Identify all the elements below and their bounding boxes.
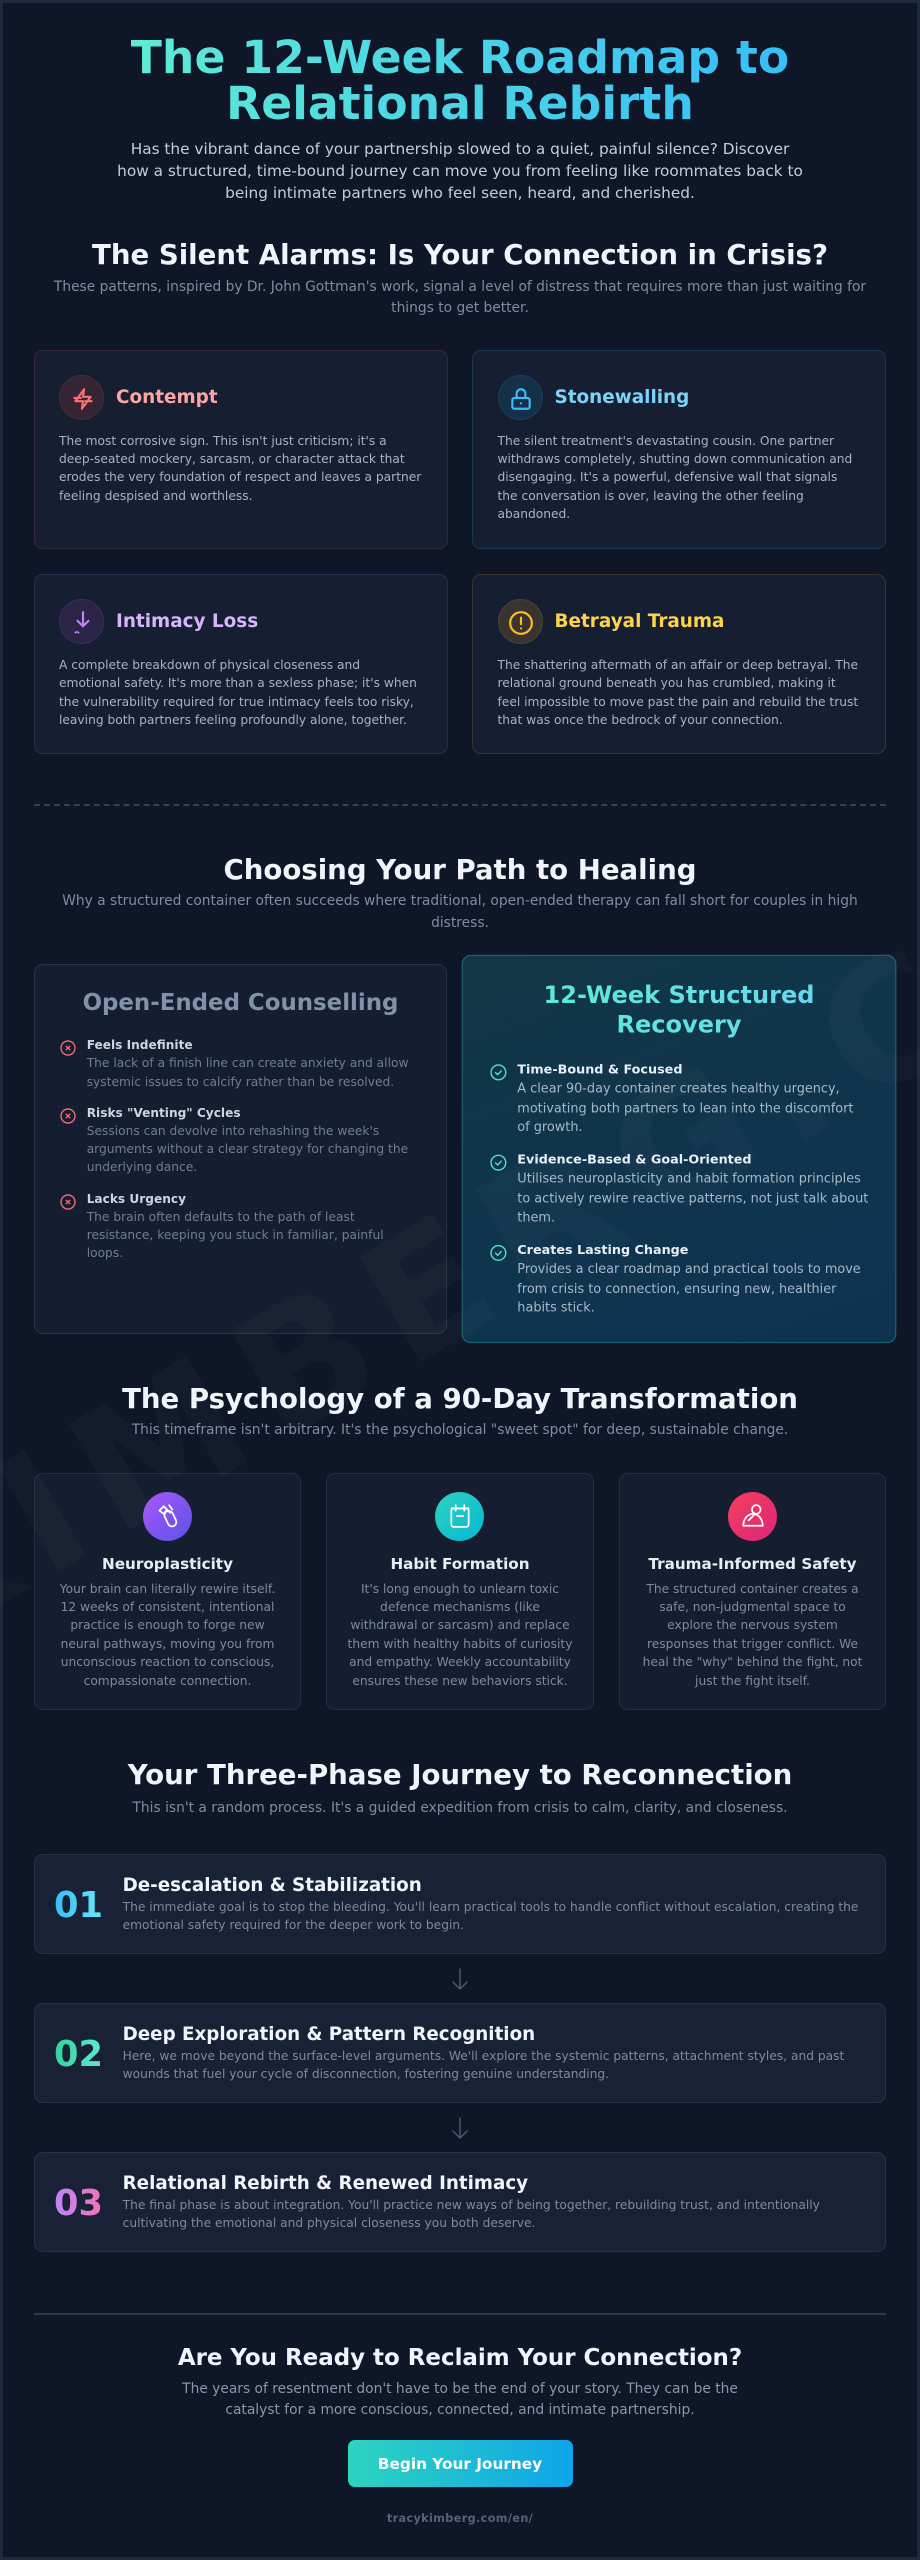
item: venting cycles xyxy=(60,1106,408,1174)
phase number 03: 03 xyxy=(54,2183,103,2224)
icon: x circle xyxy=(60,1108,76,1124)
habit formation text: and empathy. Weekly accountability xyxy=(349,1655,571,1669)
phase number 01: 01 xyxy=(54,1885,103,1926)
habit formation title: Habit Formation xyxy=(390,1555,530,1573)
panel: open-ended counselling xyxy=(34,964,447,1334)
icon: x circle xyxy=(60,1194,76,1210)
betrayal trauma text: feel impossible to move past the pain and rebuild the trust xyxy=(498,695,858,709)
item: lasting change: habits stick. xyxy=(517,1300,595,1315)
heading: three-phase journey: Your Three-Phase Journey to Reconnection xyxy=(128,1758,792,1791)
recovery heading: Recovery xyxy=(616,1011,742,1038)
item: time-bound xyxy=(490,1062,854,1134)
item: time-bound: of growth. xyxy=(517,1120,583,1134)
habit formation text: It's long enough to unlearn toxic xyxy=(361,1582,559,1596)
betrayal trauma title: Betrayal Trauma xyxy=(554,611,724,632)
trauma-informed text xyxy=(643,1582,862,1688)
item: venting cycles: Risks "Venting" Cycles xyxy=(87,1106,241,1120)
item: feels indefinite: The lack of a finish line can create anxiety and allow xyxy=(87,1056,408,1070)
panel: phase 1 xyxy=(34,1854,886,1954)
stonewalling text: disengaging. It's a powerful, defensive wall that signals xyxy=(498,470,837,484)
phase 2 text: wounds that fuel your cycle of disconnection, fostering genuine understanding. xyxy=(123,2067,609,2081)
contempt text: erodes the very foundation of respect and leaves a partner xyxy=(59,470,421,484)
intro text xyxy=(117,140,803,202)
item: evidence-based: Evidence-Based & Goal-Oriented xyxy=(517,1152,752,1167)
panel: contempt xyxy=(34,350,448,549)
icon: lightning bolt xyxy=(59,375,104,420)
intimacy loss text: leaving both partners feeling profoundly alone, together. xyxy=(59,713,407,727)
trauma-informed text: just the fight itself. xyxy=(695,1674,810,1688)
intro text: how a structured, time-bound journey can move you from feeling like roommates back to xyxy=(117,162,803,180)
stonewalling text xyxy=(497,434,852,521)
habit formation text: withdrawal or sarcasm) and replace xyxy=(350,1618,570,1632)
item: evidence-based: Utilises neuroplasticity and habit formation principles xyxy=(517,1171,861,1186)
phase 1 text: emotional safety required for the deeper work to begin. xyxy=(123,1918,464,1932)
heading: call to action: Are You Ready to Reclaim Your Connection? xyxy=(178,2345,742,2371)
subheading: three-phase journey: This isn't a random process. It's a guided expedition from crisis to calm, clarity, and closeness. xyxy=(132,1800,788,1816)
item: feels indefinite: Feels Indefinite xyxy=(87,1038,193,1052)
trauma-informed text: The structured container creates a xyxy=(646,1582,859,1596)
icon: brain xyxy=(143,1492,192,1540)
neuroplasticity title: Neuroplasticity xyxy=(102,1555,233,1573)
neuroplasticity text xyxy=(60,1582,275,1688)
intro text: Has the vibrant dance of your partnership slowed to a quiet, painful silence? Discover xyxy=(131,140,789,158)
title: Relational Rebirth xyxy=(226,76,694,130)
call to action text: catalyst for a more conscious, connected, and intimate partnership. xyxy=(225,2402,695,2418)
subheading: path to healing: distress. xyxy=(431,915,489,931)
phase 3 text xyxy=(122,2198,820,2230)
contempt text xyxy=(58,434,422,503)
item: lasting change: Provides a clear roadmap and practical tools to move xyxy=(517,1262,861,1276)
arrow: phase 1 to 2 xyxy=(452,1968,468,1990)
trauma-informed text: safe, non-judgmental space to xyxy=(659,1600,846,1614)
open-ended heading: Open-Ended Counselling xyxy=(83,990,398,1016)
contempt text: deep-seated mockery, sarcasm, or character attack that xyxy=(59,452,405,466)
panel: habit formation xyxy=(326,1473,594,1710)
panel: 12-week structured recovery xyxy=(462,955,896,1343)
stonewalling text: the conversation is over, leaving the other feeling xyxy=(498,489,804,503)
betrayal trauma text xyxy=(497,658,858,727)
phase 3 title: Relational Rebirth & Renewed Intimacy xyxy=(123,2173,528,2194)
panel: betrayal trauma xyxy=(472,574,886,754)
phase 1 text: The immediate goal is to stop the bleeding. You'll learn practical tools to handle conflict without escalation, creating the xyxy=(123,1900,858,1914)
call to action text xyxy=(182,2380,738,2418)
panel: phase 2 xyxy=(34,2003,886,2103)
neuroplasticity text: compassionate connection. xyxy=(84,1674,251,1688)
item: venting cycles: underlying dance. xyxy=(87,1160,197,1174)
item: time-bound: A clear 90-day container creates healthy urgency, xyxy=(517,1081,840,1096)
contempt text: The most corrosive sign. This isn't just criticism; it's a xyxy=(59,434,387,448)
neuroplasticity text: neural pathways, moving you from xyxy=(61,1637,274,1651)
phase 2 title: Deep Exploration & Pattern Recognition xyxy=(123,2024,535,2045)
subheading: silent alarms: These patterns, inspired by Dr. John Gottman's work, signal a level of distress that requires more than just waiting for xyxy=(54,279,866,295)
habit formation text xyxy=(348,1582,572,1688)
stonewalling text: abandoned. xyxy=(498,507,570,521)
icon: check circle xyxy=(490,1064,506,1080)
betrayal trauma text: that was once the bedrock of your connection. xyxy=(498,713,783,727)
phase number 02: 02 xyxy=(54,2034,103,2075)
item: lasting change xyxy=(490,1242,861,1315)
icon: calendar xyxy=(435,1492,484,1540)
intimacy loss title: Intimacy Loss xyxy=(116,611,258,632)
recovery heading xyxy=(544,982,814,1038)
footer link: tracykimberg.com/en/ xyxy=(387,2512,533,2525)
intimacy loss text xyxy=(59,658,417,727)
subheading: silent alarms: things to get better. xyxy=(391,300,529,316)
panel: stonewalling xyxy=(472,350,886,549)
stonewalling title: Stonewalling xyxy=(554,387,689,408)
phase 2 text: Here, we move beyond the surface-level arguments. We'll explore the systemic patterns, attachment styles, and past xyxy=(123,2049,844,2063)
betrayal trauma text: relational ground beneath you has crumbled, making it xyxy=(498,676,836,690)
intimacy loss text: emotional safety. It's more than a sexless phase; it's when xyxy=(59,676,417,690)
contempt title: Contempt xyxy=(116,387,218,408)
panel: neuroplasticity xyxy=(34,1473,301,1710)
trauma-informed text: heal the "why" behind the fight, not xyxy=(643,1655,862,1669)
panel: phase 3 xyxy=(34,2152,886,2252)
item: evidence-based xyxy=(490,1152,868,1225)
panel: trauma-informed safety xyxy=(619,1473,886,1710)
heading: psychology: The Psychology of a 90-Day Transformation xyxy=(122,1382,798,1415)
item: lacks urgency xyxy=(60,1192,384,1260)
neuroplasticity text: practice is enough to forge new xyxy=(70,1618,265,1632)
betrayal trauma text: The shattering aftermath of an affair or deep betrayal. The xyxy=(498,658,858,672)
subheading: path to healing xyxy=(62,893,858,931)
button: begin your journey: Begin Your Journey xyxy=(378,2455,542,2473)
phase 2 text xyxy=(123,2049,844,2081)
habit formation text: them with healthy habits of curiosity xyxy=(348,1637,572,1651)
item: lacks urgency: resistance, keeping you stuck in familiar, painful xyxy=(87,1228,384,1242)
phase 1 title: De-escalation & Stabilization xyxy=(123,1875,422,1896)
arrow: phase 2 to 3 xyxy=(452,2117,468,2139)
item: venting cycles: Sessions can devolve into rehashing the week's xyxy=(87,1124,379,1138)
icon: lock xyxy=(498,375,542,420)
item: lasting change: from crisis to connection, ensuring new, healthier xyxy=(517,1281,836,1296)
icon: x circle xyxy=(60,1040,76,1056)
phase 3 text: cultivating the emotional and physical closeness you both deserve. xyxy=(123,2216,535,2230)
intimacy loss text: A complete breakdown of physical closeness and xyxy=(59,658,360,672)
icon: check circle xyxy=(490,1154,506,1171)
trauma-informed text: responses that trigger conflict. We xyxy=(647,1637,858,1651)
item: time-bound: Time-Bound & Focused xyxy=(517,1062,682,1076)
neuroplasticity text: unconscious reaction to conscious, xyxy=(61,1655,274,1669)
item: time-bound: motivating both partners to lean into the discomfort xyxy=(517,1100,853,1115)
stonewalling text: withdraws completely, shutting down communication and xyxy=(498,452,852,466)
stonewalling text: The silent treatment's devastating cousin. One partner xyxy=(498,434,834,448)
item: lacks urgency: Lacks Urgency xyxy=(87,1192,186,1206)
item: lacks urgency: The brain often defaults to the path of least xyxy=(87,1210,355,1224)
neuroplasticity text: Your brain can literally rewire itself. xyxy=(60,1582,275,1596)
subheading: path to healing: Why a structured container often succeeds where traditional, open-ended therapy can fall short for couples in high xyxy=(62,893,858,909)
trauma-informed title: Trauma-Informed Safety xyxy=(648,1555,857,1573)
habit formation text: ensures these new behaviors stick. xyxy=(352,1674,568,1688)
heading: path to healing: Choosing Your Path to Healing xyxy=(223,853,696,886)
icon: down arrow xyxy=(59,599,104,644)
intimacy loss text: the vulnerability required for true intimacy feels too risky, xyxy=(59,695,414,709)
icon: alert circle xyxy=(498,599,542,644)
contempt text: feeling despised and worthless. xyxy=(59,489,252,503)
item: evidence-based: to actively rewire reactive patterns, not just talk about xyxy=(517,1191,868,1205)
icon: person in shelter xyxy=(728,1492,777,1540)
intro text: being intimate partners who feel seen, heard, and cherished. xyxy=(225,184,695,202)
item: feels indefinite: systemic issues to calcify rather than be resolved. xyxy=(87,1075,394,1089)
subheading: psychology: This timeframe isn't arbitrary. It's the psychological "sweet spot" for deep, sustainable change. xyxy=(132,1422,788,1438)
recovery heading: 12-Week Structured xyxy=(544,982,814,1009)
icon: check circle xyxy=(490,1244,506,1261)
item: feels indefinite xyxy=(60,1038,408,1089)
phase 1 text xyxy=(122,1900,858,1932)
item: venting cycles: arguments without a clear strategy for changing the xyxy=(87,1142,408,1156)
trauma-informed text: explore the nervous system xyxy=(667,1618,838,1632)
habit formation text: defence mechanisms (like xyxy=(380,1600,540,1614)
panel: intimacy loss xyxy=(34,574,448,754)
item: lacks urgency: loops. xyxy=(87,1246,123,1260)
title xyxy=(131,30,789,130)
item: lasting change: Creates Lasting Change xyxy=(517,1242,688,1257)
title: The 12-Week Roadmap to xyxy=(131,30,789,84)
subheading: silent alarms xyxy=(54,279,866,316)
neuroplasticity text: 12 weeks of consistent, intentional xyxy=(61,1600,274,1614)
call to action text: The years of resentment don't have to be the end of your story. They can be the xyxy=(182,2380,738,2396)
button: begin your journey xyxy=(348,2440,572,2487)
heading: silent alarms: The Silent Alarms: Is Your Connection in Crisis? xyxy=(92,238,828,271)
item: evidence-based: them. xyxy=(517,1210,555,1225)
phase 3 text: The final phase is about integration. You'll practice new ways of being together, rebuilding trust, and intentionally xyxy=(123,2198,820,2212)
